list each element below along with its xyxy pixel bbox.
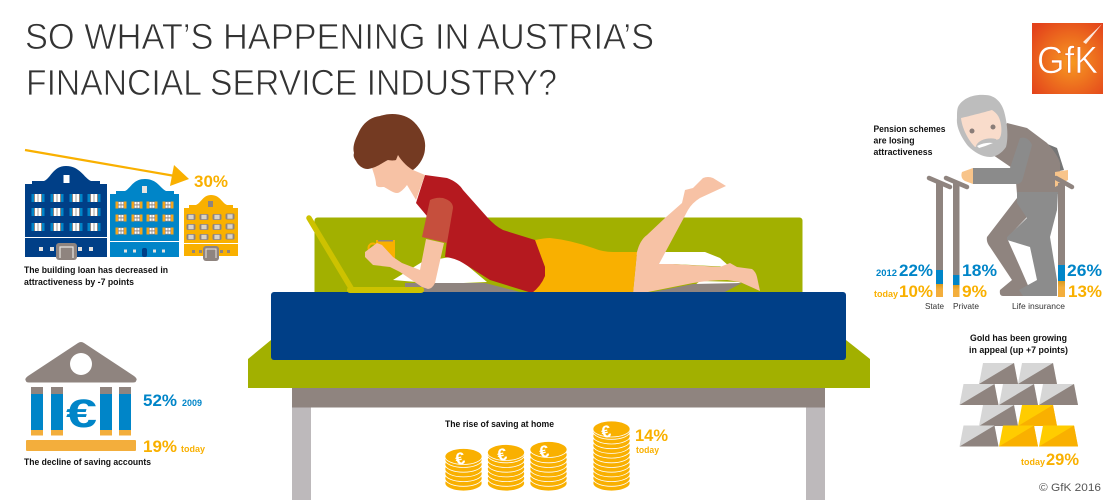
title: SO WHAT’S HAPPENING IN AUSTRIA’S — [25, 16, 654, 57]
arrow: falling trend — [25, 150, 189, 186]
stat: 19% today: today — [181, 444, 206, 455]
labels: pension types: State — [925, 301, 944, 311]
jacket tail — [1045, 143, 1064, 172]
caption: building loan: The building loan has decreased in — [24, 265, 168, 275]
caption: saving accounts: The decline of saving accounts — [24, 457, 151, 467]
icon: bank with euro — [25, 342, 137, 451]
hair — [957, 95, 1007, 157]
panel: building loan — [24, 150, 238, 287]
legs — [633, 177, 760, 293]
sofa mattress — [271, 292, 846, 360]
table top — [292, 388, 825, 408]
stats: today row: 10% — [899, 282, 933, 301]
stats: today row: 13% — [1068, 282, 1102, 301]
stat: 29% today: 29% — [1046, 450, 1079, 469]
caption: pension schemes: Pension schemes — [874, 124, 946, 134]
stats: today row: today — [874, 289, 899, 300]
labels: pension types — [925, 301, 1065, 311]
panel: saving at home — [445, 419, 668, 491]
front leg — [1007, 192, 1058, 296]
icon: yellow house — [184, 195, 238, 261]
caption: pension schemes — [874, 124, 946, 157]
icon: coin stack 1: € — [453, 449, 467, 469]
stat: 14% today — [635, 426, 668, 456]
stat: 19% today — [143, 437, 206, 456]
hands — [961, 168, 973, 184]
icon: coin stack 2: € — [495, 445, 509, 465]
stat: 14% today: today — [636, 445, 660, 456]
panel: saving accounts — [24, 342, 206, 467]
caption: gold: in appeal (up +7 points) — [969, 345, 1068, 355]
face and neck — [372, 155, 425, 200]
beard — [976, 138, 999, 155]
caption: pension schemes: attractiveness — [874, 147, 932, 157]
table legs — [292, 407, 825, 500]
icon: bank with euro: € — [66, 392, 97, 436]
icon: coin stack 4: € — [599, 422, 613, 442]
arm — [365, 239, 444, 289]
torso — [993, 123, 1060, 194]
stat: 29% today — [1021, 450, 1079, 469]
back leg — [987, 198, 1030, 296]
logo: GfK: GfK — [1037, 40, 1098, 82]
illustration: woman reading on laptop — [309, 114, 760, 293]
skirt — [532, 238, 637, 293]
caption: pension schemes: are losing — [874, 136, 914, 146]
labels: pension types: Private — [953, 301, 979, 311]
illustration: old man — [957, 95, 1068, 296]
logo: GfK — [1032, 23, 1103, 94]
icon: coin stack 1 — [445, 448, 482, 491]
hair — [353, 114, 425, 170]
stats: 2012 row: 22% — [899, 261, 933, 280]
shirt — [416, 175, 545, 293]
icon: coin stack 3: € — [537, 442, 551, 462]
caption: gold: Gold has been growing — [970, 333, 1067, 343]
sofa base — [248, 340, 870, 388]
panel: pension schemes — [874, 95, 1102, 311]
title: FINANCIAL SERVICE INDUSTRY? — [26, 62, 557, 103]
mug — [368, 240, 395, 260]
stats: 2012 row — [876, 261, 1102, 280]
sleeve — [422, 198, 453, 243]
icon: blue house — [110, 179, 179, 257]
stats: today row — [874, 282, 1102, 301]
stat: 29% today: today — [1021, 457, 1046, 468]
stats: 2012 row: 18% — [962, 261, 997, 280]
icon: bullion stack — [960, 363, 1078, 446]
stat: 14% today: 14% — [635, 426, 668, 445]
chart: cane bars — [929, 178, 1072, 297]
caption: gold — [969, 333, 1068, 355]
copyright: © GfK 2016 — [1039, 482, 1101, 494]
illustration: sofa and table — [248, 218, 870, 500]
stat: 30%: 30% — [194, 172, 228, 191]
icon: coin stack 3 — [530, 442, 567, 491]
arm — [973, 138, 1032, 184]
stat: 52% 2009: 52% — [143, 391, 177, 410]
icon: coin stack 2 — [487, 444, 525, 491]
panel: gold — [960, 333, 1079, 469]
caption: building loan: attractiveness by -7 points — [24, 277, 134, 287]
stat: 19% today: 19% — [143, 437, 177, 456]
face — [961, 110, 1001, 147]
sofa back — [314, 218, 802, 298]
caption: building loan — [24, 265, 168, 287]
caption: saving at home: The rise of saving at home — [445, 419, 554, 429]
stats: today row: 9% — [962, 282, 987, 301]
laptop — [309, 218, 421, 290]
stat: 52% 2009: 2009 — [182, 398, 202, 408]
title — [25, 16, 654, 103]
icon: coin stack 4 — [593, 421, 630, 491]
labels: pension types: Life insurance — [1012, 301, 1065, 311]
stats: 2012 row: 26% — [1067, 261, 1102, 280]
icon: dark blue house — [25, 166, 107, 260]
stats: 2012 row: 2012 — [876, 268, 897, 278]
illustration: pillows — [393, 252, 742, 293]
stat: 52% 2009 — [143, 391, 202, 410]
